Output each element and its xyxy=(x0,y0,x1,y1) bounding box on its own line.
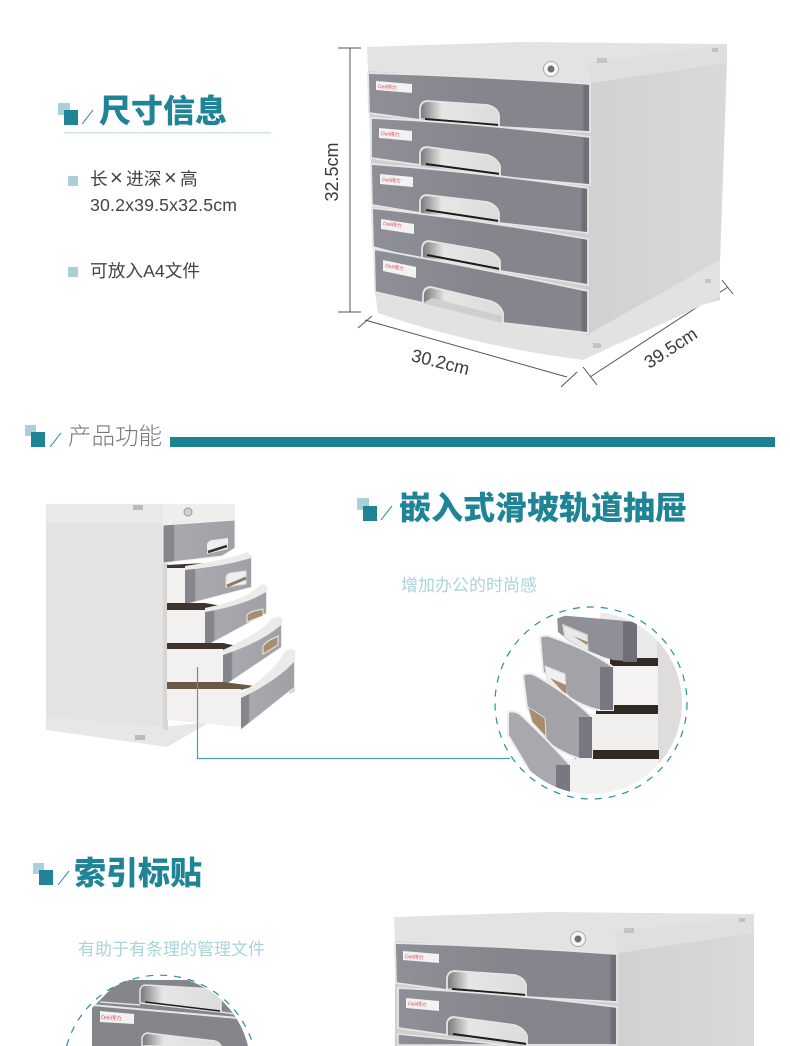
subtitle: 增加办公的时尚感: 增加办公的时尚感 xyxy=(401,576,537,595)
dimension: width 30.2cm xyxy=(358,316,577,387)
product photo: cabinet front view: Deli得力 xyxy=(405,953,424,961)
product photo: open drawers xyxy=(46,504,295,747)
heading: 尺寸信息: 尺寸信息 xyxy=(99,86,227,132)
drawer 2 open xyxy=(167,552,252,605)
dimension: depth 39.5cm xyxy=(583,280,733,385)
drawer 2 xyxy=(371,118,590,185)
drawer 1 xyxy=(368,73,590,132)
drawer 5 open xyxy=(167,649,295,730)
callout: index label detail xyxy=(67,975,253,1046)
subtitle: 有助于有条理的管理文件: 有助于有条理的管理文件 xyxy=(78,940,265,959)
heading: 索引标贴: 索引标贴 xyxy=(74,848,202,894)
product photo: cabinet front view: Deli得力 xyxy=(408,1000,427,1009)
drawer 2: Deli得力 xyxy=(381,130,400,139)
text block: size spec: × xyxy=(164,165,177,190)
drawer 1 closed xyxy=(163,520,235,563)
text block: size spec: 30.2x39.5x32.5cm xyxy=(90,195,237,215)
heading: 嵌入式滑坡轨道抽屉: 嵌入式滑坡轨道抽屉 xyxy=(399,483,687,529)
drawer 5 xyxy=(374,249,588,333)
dimension: height 32.5cm xyxy=(322,48,361,312)
drawer 4 open xyxy=(167,617,282,687)
dimension: width 30.2cm: 30.2cm xyxy=(409,345,472,379)
drawer 3 open xyxy=(167,584,267,647)
product photo: cabinet front view xyxy=(394,912,754,1046)
drawer 3 xyxy=(371,164,588,233)
callout: drawer detail xyxy=(495,607,687,799)
text block: size spec: 进深 xyxy=(126,169,161,189)
section header: 产品功能 xyxy=(25,417,775,451)
text block: size spec: 长 xyxy=(90,169,108,189)
drawer 5: Deli得力 xyxy=(385,262,404,273)
dimension: height 32.5cm: 32.5cm xyxy=(322,142,342,202)
callout: index label detail: Deli得力 xyxy=(101,1013,122,1022)
drawer 4: Deli得力 xyxy=(383,220,402,230)
text block: size spec: × xyxy=(110,165,123,190)
heading: 尺寸信息 xyxy=(58,86,271,134)
text block: size spec xyxy=(68,165,237,215)
connector line xyxy=(198,667,510,758)
drawer 4 xyxy=(372,208,588,285)
text block: A4 capacity: 可放入A4文件 xyxy=(90,261,200,281)
drawer 3: Deli得力 xyxy=(382,176,401,185)
lock xyxy=(544,62,558,76)
product photo: closed cabinet with dimensions xyxy=(367,42,727,360)
dimension: depth 39.5cm: 39.5cm xyxy=(641,324,701,372)
drawer 1: Deli得力 xyxy=(378,83,397,91)
text block: size spec: 高 xyxy=(180,169,198,189)
section header: 产品功能: 产品功能 xyxy=(68,417,162,451)
